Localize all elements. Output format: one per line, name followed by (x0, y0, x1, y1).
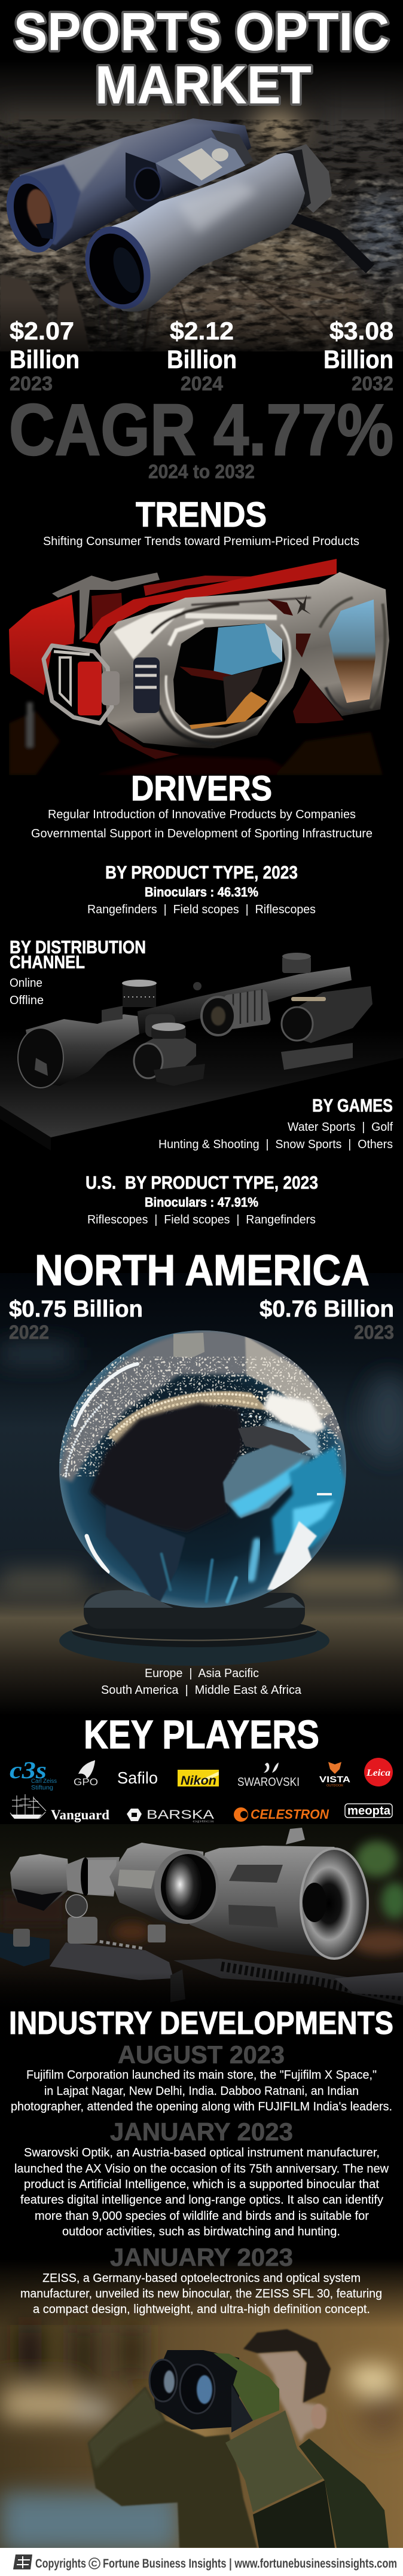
south america (106, 1504, 185, 1608)
small scope center (134, 1023, 205, 1086)
right cyan (272, 1446, 346, 1554)
segment: by product type (87, 862, 316, 916)
segment: by product type: Binoculars : 46.31% (145, 885, 258, 900)
segment: by distribution channel: CHANNEL (10, 952, 85, 972)
logo: Carl Zeiss: Carl Zeiss (31, 1778, 57, 1785)
dark ocean (90, 1403, 243, 1532)
drivers text: Governmental Support in Development of Sporting Infrastructure (31, 827, 373, 840)
buckle (44, 645, 120, 723)
development: January 2023 Zeiss: a compact design, lightweight, and ultra-high definition concept. (33, 2302, 370, 2316)
white bottom right (267, 1521, 317, 1590)
scope left tube (10, 1854, 120, 1917)
logo: Vista Outdoor (319, 1762, 350, 1788)
development: January 2023 Zeiss: JANUARY 2023 (110, 2243, 293, 2271)
hero photo: binoculars on a log (0, 60, 403, 353)
logo: Carl Zeiss: Stiftung (31, 1785, 53, 1791)
stat: 2032 (323, 317, 393, 394)
segment: U.S. by product type: Binoculars : 47.91% (145, 1195, 258, 1210)
stat: 2023: 2023 (10, 372, 53, 394)
rifle scopes photo (0, 953, 403, 1151)
crystal globe (59, 1330, 347, 1608)
logo row 1 (10, 1757, 393, 1791)
stat: North America 2023: $0.76 Billion (259, 1296, 394, 1322)
bottom photo: man with binoculars (0, 2259, 403, 2552)
segment: U.S. by product type (86, 1172, 318, 1226)
globe pedestal rim (84, 1590, 305, 1608)
front barrel (74, 153, 305, 319)
stat: 2024 (167, 317, 237, 394)
africa (223, 1445, 311, 1518)
development: January 2023 Swarovski: product is Artificial Intelligence, which is a supported binocular that (24, 2177, 379, 2191)
scope middle housing (109, 1843, 219, 1925)
logo: Vanguard: Vanguard (51, 1807, 109, 1822)
right lens (329, 599, 375, 703)
development: January 2023 Zeiss (20, 2243, 382, 2316)
stat: 2032: 2032 (352, 372, 393, 394)
development: January 2023 Zeiss: manufacturer, unveiled its new binocular, the ZEISS SFL 30, featuring (20, 2287, 382, 2300)
logo row 2 (10, 1794, 392, 1824)
footer (0, 2548, 403, 2576)
thermal scope photo (0, 1824, 403, 2011)
icon: copyright symbol (89, 2558, 100, 2569)
stat: North America 2022 (9, 1296, 143, 1343)
logo: Leica (364, 1758, 393, 1786)
table surface (0, 1010, 403, 1137)
stat: 2023 (10, 317, 80, 394)
development: August 2023: Fujifilm Corporation launched its main store, the "Fujifilm X Space," (26, 2068, 377, 2082)
bark spikes (0, 275, 90, 353)
heading: drivers: DRIVERS (131, 769, 272, 808)
logo: Carl Zeiss (10, 1757, 57, 1791)
stat: 2023: $2.07 (10, 317, 74, 345)
logo: Carl Zeiss: c3s (10, 1757, 47, 1783)
segment: by distribution channel (10, 937, 146, 1007)
goggle frame (100, 572, 389, 748)
logo: Barska (127, 1808, 215, 1824)
side cylinder (133, 657, 160, 713)
stat: North America 2023 (259, 1296, 394, 1343)
logo: Swarovski: SWAROVSKI (237, 1776, 300, 1789)
copyright text: Copyrights (35, 2557, 86, 2571)
development: January 2023 Swarovski (14, 2118, 389, 2238)
man sweater (88, 2387, 389, 2548)
drivers text: Regular Introduction of Innovative Products by Companies (48, 808, 356, 821)
eurasia (238, 1425, 311, 1454)
heading: trends: TRENDS (136, 495, 267, 534)
segment: by distribution channel: BY DISTRIBUTION (10, 937, 146, 957)
segment: U.S. by product type: Riflescopes | Field scopes | Rangefinders (87, 1213, 316, 1226)
logo: Swarovski (237, 1763, 300, 1789)
rifle stock (0, 1932, 50, 1966)
icon: copyright symbol: C (91, 2559, 97, 2568)
small scope right (281, 986, 373, 1070)
globe base (59, 1593, 329, 1666)
development: January 2023 Swarovski: Swarovski Optik, an Austria-based optical instrument manufacturer, (24, 2146, 380, 2159)
development: August 2023 (11, 2040, 392, 2113)
rifle rail (13, 1917, 403, 2005)
gloved hand (213, 2353, 279, 2433)
development: August 2023: AUGUST 2023 (118, 2040, 285, 2069)
development: January 2023 Swarovski: outdoor activities, such as birdwatching and hunting. (62, 2225, 340, 2238)
development: January 2023 Swarovski: more than 9,000 species of wildlife and birds and is suitable for (35, 2209, 369, 2223)
silver upper band (59, 1330, 347, 1482)
streaks (72, 1364, 257, 1602)
main lens (173, 623, 285, 729)
logo: Celestron: CELESTRON (251, 1807, 329, 1822)
stat: 2024: 2024 (181, 372, 224, 394)
eyepiece (285, 144, 332, 213)
development: January 2023 Swarovski: features digital intelligence and long-range optics. It also can identify (20, 2193, 384, 2207)
binoculars (149, 2350, 239, 2430)
development: January 2023 Swarovski: launched the AX Visio on the occasion of its 75th anniversary. The new (14, 2162, 389, 2176)
logo: Barska: optics (193, 1820, 215, 1824)
logo: Vista Outdoor: OUTDOOR (326, 1784, 343, 1788)
logo: Vista Outdoor: VISTA (319, 1775, 350, 1785)
logo: Nikon (178, 1770, 219, 1788)
drivers text (31, 808, 373, 840)
stat: 2024: Billion (167, 345, 237, 374)
logo: Leica: Leica (366, 1768, 390, 1778)
title: MARKET (95, 56, 312, 115)
globe photo (0, 1273, 403, 1715)
title: SPORTS OPTIC (14, 2, 389, 62)
title (14, 2, 389, 115)
logo: GPO (74, 1760, 98, 1788)
bead texture (60, 1357, 341, 1476)
logo: Vanguard (10, 1794, 109, 1822)
stat: 2024: $2.12 (170, 317, 234, 345)
bottom fade (0, 1972, 403, 2011)
man head (243, 2329, 331, 2443)
goggle reflection (9, 702, 383, 775)
development: January 2023 Zeiss: ZEISS, a Germany-based optoelectronics and optical system (42, 2271, 361, 2285)
logo: Nikon: Nikon (181, 1774, 216, 1788)
stat: 2032: $3.08 (329, 317, 393, 345)
star emblem (295, 595, 311, 614)
large scope (18, 966, 352, 1088)
logo: GPO: GPO (74, 1776, 98, 1788)
goggle strap (9, 559, 337, 695)
heading: key players: KEY PLAYERS (84, 1712, 319, 1757)
goggles photo (9, 559, 389, 775)
logo: Safilo: Safilo (117, 1769, 158, 1787)
center hinge and plate (126, 130, 253, 218)
stat: 2032: Billion (323, 345, 393, 374)
trends text: Shifting Consumer Trends toward Premium-Priced Products (43, 535, 359, 548)
segment: U.S. by product type: U.S. BY PRODUCT TYPE, 2023 (86, 1172, 318, 1193)
stat: North America 2022: 2022 (9, 1321, 49, 1343)
segment: by games (158, 1095, 393, 1151)
development: August 2023: photographer, attended the opening along with FUJIFILM India's leaders. (11, 2100, 392, 2113)
logo: Barska: BARSKA (146, 1808, 214, 1822)
stat: North America 2023: 2023 (354, 1321, 394, 1343)
stat: North America 2022: $0.75 Billion (9, 1296, 143, 1322)
scope main body (190, 1828, 368, 1959)
development: January 2023 Swarovski: JANUARY 2023 (110, 2118, 293, 2146)
segment: by product type: BY PRODUCT TYPE, 2023 (105, 862, 298, 883)
development: August 2023: in Lajpat Nagar, New Delhi, India. Dabboo Ratnani, an Indian (44, 2084, 359, 2098)
logo: Meopta: meopta (347, 1804, 391, 1818)
ribbed objective (193, 953, 311, 1035)
segment: by distribution channel: Online (10, 977, 42, 990)
segment: by product type: Rangefinders | Field scopes | Riflescopes (87, 903, 316, 916)
segment: by games: Hunting & Shooting | Snow Sports | Others (158, 1138, 393, 1151)
CAGR period: 2024 to 2032 (148, 461, 255, 482)
stat: 2023: Billion (10, 345, 80, 374)
other regions: South America | Middle East & Africa (101, 1684, 302, 1697)
segment: by distribution channel: Offline (10, 994, 44, 1007)
other regions (101, 1667, 302, 1697)
icon: Fortune Business Insights logo (13, 2554, 32, 2569)
strap (293, 218, 370, 269)
white glare right (263, 1393, 326, 1434)
other regions: Europe | Asia Pacific (145, 1667, 259, 1680)
back barrel (0, 118, 251, 258)
segment: by games: Water Sports | Golf (288, 1121, 393, 1134)
heading: north america: NORTH AMERICA (35, 1247, 370, 1295)
